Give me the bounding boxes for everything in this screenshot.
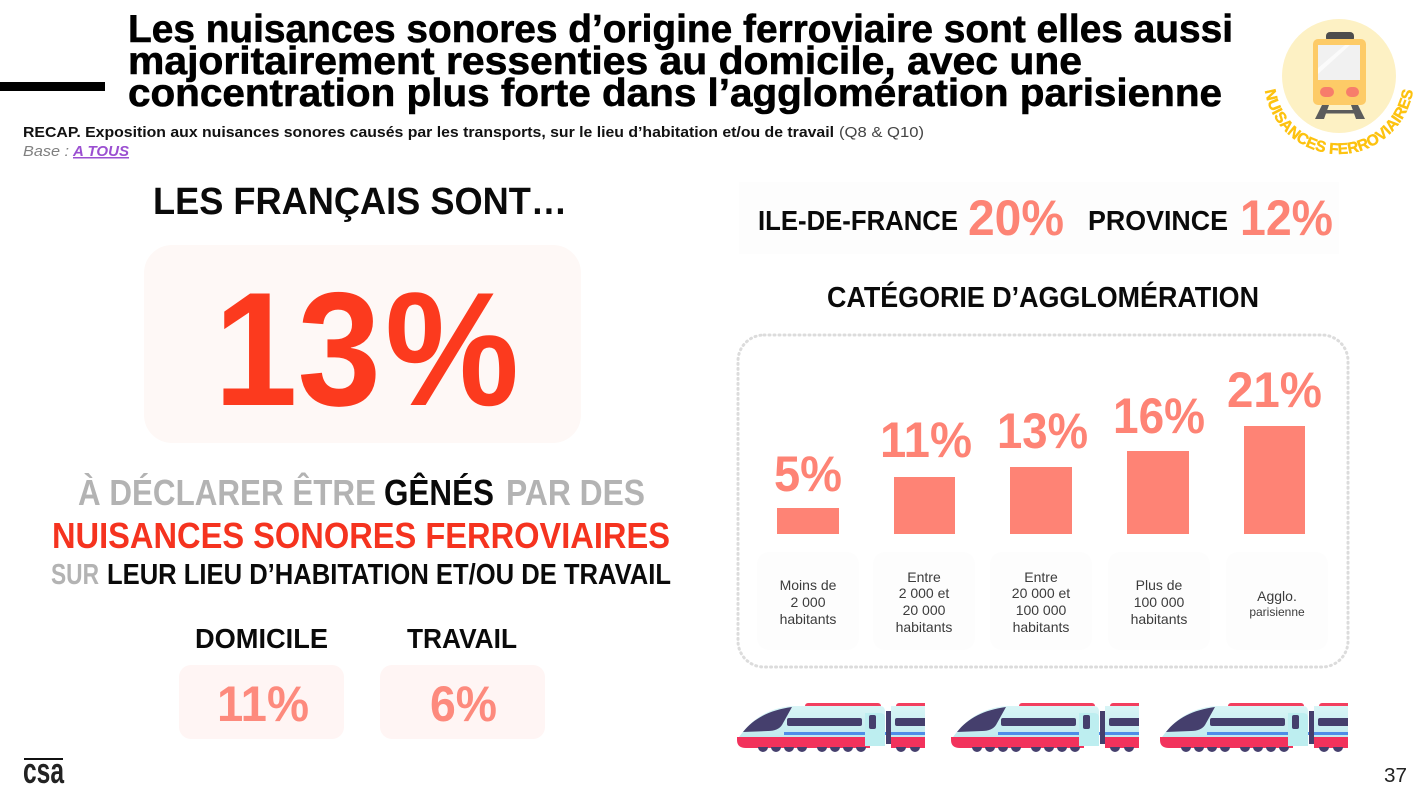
card: travail 6%: 6% xyxy=(430,676,497,732)
category labels: 20 000 et xyxy=(1012,585,1070,601)
category labels: 100 000 xyxy=(1016,602,1067,618)
category labels: 100 000 xyxy=(1134,594,1185,610)
title: concentration plus forte dans l’agglomération parisienne xyxy=(128,72,1222,115)
logo: csa: csa xyxy=(23,750,65,791)
card: travail 6% xyxy=(380,665,545,739)
label: travail: TRAVAIL xyxy=(407,623,517,654)
statement text: PAR DES xyxy=(506,472,645,513)
bar values: 5% xyxy=(774,446,842,502)
category labels: 2 000 xyxy=(790,594,826,610)
category labels: 20 000 xyxy=(903,602,946,618)
logo: csa xyxy=(23,750,65,791)
base note xyxy=(23,143,129,160)
bar values: 13% xyxy=(997,403,1088,459)
panel: headline figure 13% xyxy=(144,245,581,443)
category labels: parisienne xyxy=(1249,605,1305,619)
illustration: train 1 xyxy=(737,703,936,752)
panel: regions xyxy=(739,182,1339,254)
category labels xyxy=(780,569,1305,635)
bar values: 16% xyxy=(1113,388,1205,444)
label backgrounds xyxy=(757,552,1328,650)
category labels: habitants xyxy=(896,619,952,635)
statement text xyxy=(51,471,671,591)
statement text: À DÉCLARER ÊTRE xyxy=(78,471,376,513)
bar values: 21% xyxy=(1227,362,1322,418)
accent bar xyxy=(0,82,105,91)
category labels: Plus de xyxy=(1136,577,1183,593)
label: domicile: DOMICILE xyxy=(195,623,328,654)
icon: train badge xyxy=(1264,19,1413,154)
title: majoritairement ressenties au domicile, avec une xyxy=(128,40,1082,83)
base note: Base : xyxy=(23,143,69,160)
heading: les français sont: LES FRANÇAIS SONT… xyxy=(153,181,567,223)
card: domicile 11%: 11% xyxy=(217,676,309,732)
bar values xyxy=(774,362,1322,502)
page number: 37 xyxy=(1384,765,1407,787)
bars xyxy=(777,426,1305,534)
panel: regions: PROVINCE xyxy=(1088,205,1228,236)
panel: bar chart by agglomeration size xyxy=(738,335,1348,667)
panel: regions: 12% xyxy=(1240,190,1333,246)
icon: train badge: NUISANCES FERROVIAIRES xyxy=(1264,88,1413,154)
category labels: Entre xyxy=(1024,569,1058,585)
heading: catégorie d'agglomération: CATÉGORIE D’AGGLOMÉRATION xyxy=(827,280,1259,314)
illustration: train 3 xyxy=(1160,703,1359,752)
bar values: 11% xyxy=(880,412,972,468)
subtitle: question recap: (Q8 & Q10) xyxy=(839,124,924,141)
panel: headline figure 13%: 13 xyxy=(214,259,381,440)
illustration: train 2 xyxy=(951,703,1150,752)
category labels: habitants xyxy=(780,611,836,627)
category labels: habitants xyxy=(1013,619,1069,635)
card: domicile 11% xyxy=(179,665,344,739)
base note: A TOUS xyxy=(72,143,129,160)
category labels: Moins de xyxy=(780,577,837,593)
category labels: Agglo. xyxy=(1257,588,1297,604)
statement text: NUISANCES SONORES FERROVIAIRES xyxy=(52,515,670,556)
panel: headline figure 13%: % xyxy=(385,259,519,440)
category labels: 2 000 et xyxy=(899,585,949,601)
statement text: LEUR LIEU D’HABITATION ET/OU DE TRAVAIL xyxy=(107,559,671,591)
panel: regions: 20% xyxy=(968,190,1064,246)
statement text: SUR xyxy=(51,559,99,591)
statement text: GÊNÉS xyxy=(384,471,494,513)
panel: regions: ILE-DE-FRANCE xyxy=(758,205,958,236)
title xyxy=(128,8,1233,115)
category labels: Entre xyxy=(907,569,941,585)
subtitle: question recap: RECAP. Exposition aux nuisances sonores causés par les transports, sur le lieu d’habitation et/ou de travail xyxy=(23,124,834,141)
category labels: habitants xyxy=(1131,611,1187,627)
title: Les nuisances sonores d’origine ferroviaire sont elles aussi xyxy=(128,8,1233,51)
